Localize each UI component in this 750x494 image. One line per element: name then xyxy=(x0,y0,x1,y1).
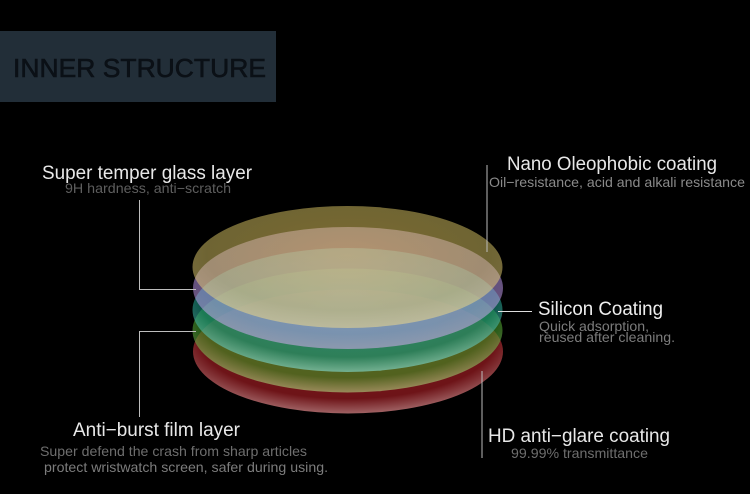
leader line: silicon coating xyxy=(498,310,532,312)
label: super temper glass layer: Super temper glass layer xyxy=(42,163,253,184)
label: anti-burst film layer xyxy=(40,420,328,475)
label: anti-burst film layer: Super defend the crash from sharp articles xyxy=(40,443,307,459)
layer: anti-burst film (green) xyxy=(192,268,502,392)
label: super temper glass layer xyxy=(42,163,253,196)
label: nano oleophobic coating xyxy=(489,154,745,190)
label: super temper glass layer: 9H hardness, anti−scratch xyxy=(65,180,231,196)
label: nano oleophobic coating: Oil−resistance, acid and alkali resistance xyxy=(489,174,745,190)
label: anti-burst film layer: protect wristwatch screen, safer during using. xyxy=(44,459,328,475)
label: HD anti-glare coating: 99.99% transmittance xyxy=(511,445,648,461)
label: silicon coating xyxy=(538,299,675,345)
label: HD anti-glare coating xyxy=(488,426,670,461)
label: nano oleophobic coating: Nano Oleophobic coating xyxy=(507,154,717,175)
title banner: INNER STRUCTURE xyxy=(13,55,266,83)
leader line: super temper glass layer xyxy=(140,200,196,290)
layered disc diagram xyxy=(192,206,503,414)
label: anti-burst film layer: Anti−burst film layer xyxy=(73,420,241,441)
leader line: nano oleophobic coating xyxy=(486,165,488,252)
label: silicon coating: reused after cleaning. xyxy=(539,329,675,345)
label: silicon coating: Quick adsorption, xyxy=(539,318,649,334)
layer: nano oleophobic coating (olive) xyxy=(192,206,502,328)
layer: silicon coating (teal) xyxy=(192,248,502,372)
layer: HD anti-glare coating (red) xyxy=(193,290,503,414)
title banner xyxy=(0,31,276,102)
layer: super temper glass (purple) xyxy=(193,227,503,349)
leader line: anti-burst film layer xyxy=(140,332,196,417)
label: silicon coating: Silicon Coating xyxy=(538,299,663,320)
leader line: HD anti-glare coating xyxy=(481,371,483,458)
label: HD anti-glare coating: HD anti−glare coating xyxy=(488,426,670,447)
